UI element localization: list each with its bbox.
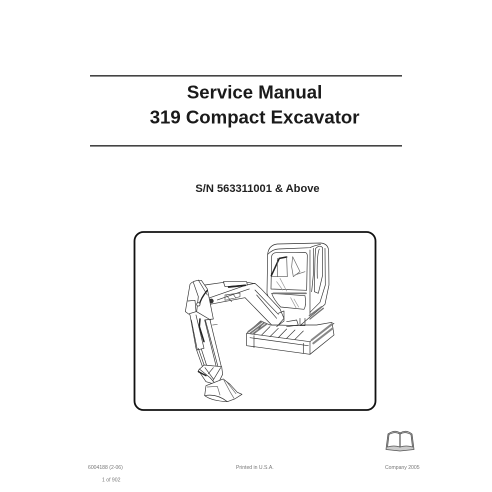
- excavator bucket: [198, 365, 242, 402]
- title: Service Manual: [187, 82, 322, 102]
- footer text: [88, 465, 420, 484]
- serial number: S/N 563311001 & Above: [195, 183, 320, 195]
- footer text: 1 of 902: [102, 478, 121, 484]
- title: 319 Compact Excavator: [150, 106, 360, 128]
- excavator tracks: [247, 321, 334, 354]
- icon: open book: [386, 431, 414, 451]
- footer text: Company 2005: [385, 465, 420, 471]
- excavator arm: [185, 280, 221, 369]
- illustration: compact excavator: [185, 243, 334, 402]
- footer text: Printed in U.S.A.: [236, 465, 274, 471]
- title: [150, 82, 360, 128]
- excavator boom: [205, 282, 298, 327]
- footer text: 6004188 (2-06): [88, 465, 123, 471]
- excavator cab: [267, 243, 329, 326]
- illustration frame: [134, 232, 376, 410]
